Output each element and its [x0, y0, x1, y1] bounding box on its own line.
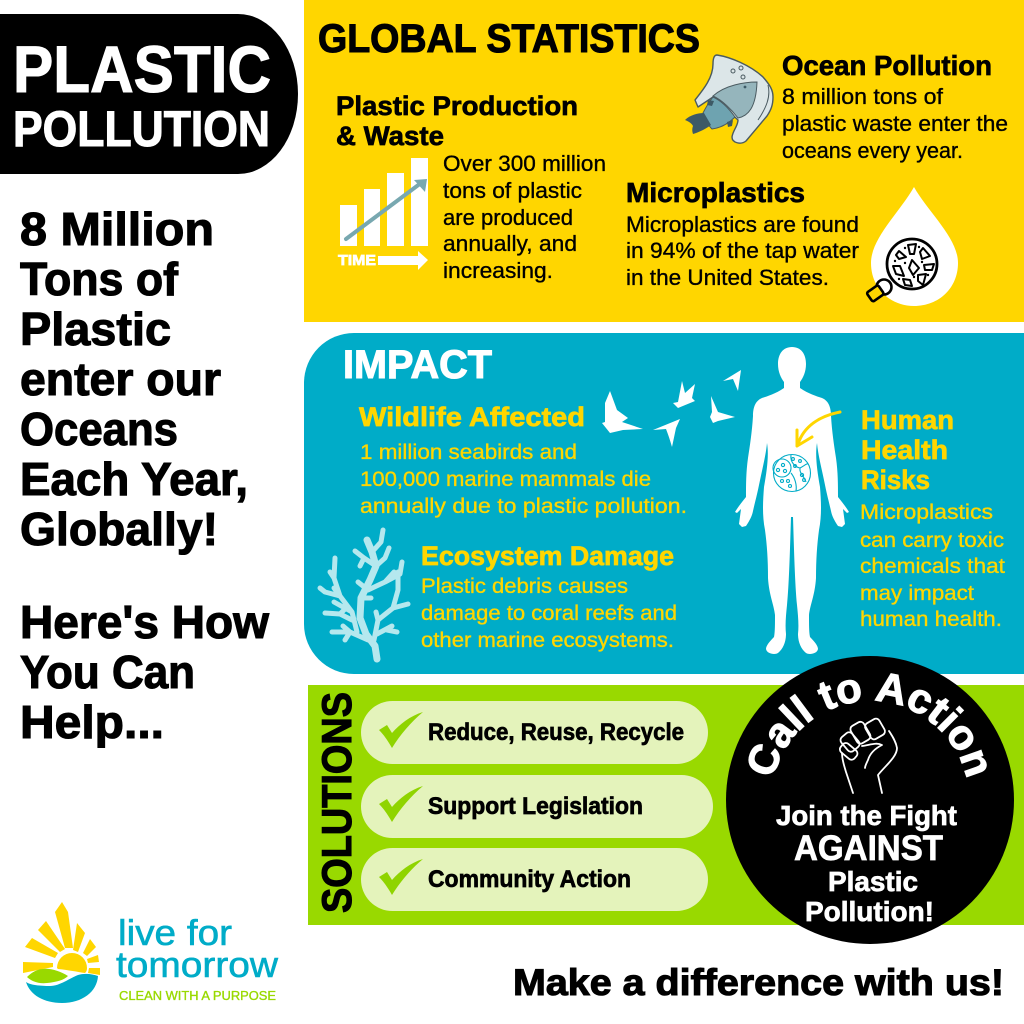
subheading: plastic production and waste: & Waste — [336, 121, 444, 151]
panel: impact — [304, 333, 1024, 674]
icon: growth bar chart — [338, 158, 428, 270]
left headline text: Here's How — [20, 596, 269, 648]
pill: support legislation — [361, 775, 713, 838]
left headline text: Plastic — [20, 303, 171, 355]
icon: microplastics in gut — [773, 454, 810, 492]
call to action badge — [726, 656, 1014, 944]
block: microplastics — [626, 177, 859, 290]
block: human health risks: Risks — [861, 465, 930, 495]
block: microplastics: in the United States. — [626, 265, 829, 290]
title badge — [0, 14, 298, 174]
pill: reduce reuse recycle — [361, 701, 708, 764]
block: ecosystem damage: Plastic debris causes — [421, 575, 628, 598]
text: production body — [443, 151, 606, 283]
icon: raised fist — [838, 717, 897, 793]
block: ocean pollution: oceans every year. — [782, 138, 963, 163]
text: production body: increasing. — [443, 258, 553, 283]
block: ocean pollution: 8 million tons of — [782, 84, 944, 109]
block: ecosystem damage — [421, 541, 677, 652]
icon: growth bar chart: TIME — [338, 252, 376, 269]
left headline text: Tons of — [20, 253, 179, 305]
text: join the fight: AGAINST — [794, 829, 943, 868]
title badge: POLLUTION — [13, 101, 270, 157]
pill: reduce reuse recycle: Reduce, Reuse, Recycle — [428, 719, 684, 746]
heading: impact: IMPACT — [343, 343, 492, 387]
block: microplastics: Microplastics are found — [626, 212, 859, 237]
block: human health risks: human health. — [860, 608, 1002, 631]
block: human health risks: Health — [861, 435, 948, 465]
block: wildlife affected: 1 million seabirds and — [360, 441, 577, 464]
block: ocean pollution — [782, 50, 1008, 163]
text: production body: are produced — [443, 205, 573, 230]
logo wordmark: CLEAN WITH A PURPOSE — [119, 988, 276, 1003]
icon: coral — [320, 530, 408, 659]
subheading: plastic production and waste: Plastic Production — [336, 91, 578, 121]
heading: global statistics: GLOBAL STATISTICS — [318, 17, 700, 61]
text: join the fight: Plastic — [828, 866, 918, 897]
block: human health risks: Microplastics — [860, 501, 993, 524]
logo: live for tomorrow — [23, 902, 279, 1003]
icon: fish in plastic bag — [685, 55, 773, 143]
icon: human body — [735, 347, 849, 654]
heading: solutions: SOLUTIONS — [313, 692, 360, 913]
logo wordmark: tomorrow — [116, 944, 279, 985]
block: wildlife affected: 100,000 marine mammals die — [360, 468, 651, 491]
curved heading: call to action: Call to Action — [748, 673, 987, 778]
block: human health risks — [860, 405, 1005, 631]
block: wildlife affected: Wildlife Affected — [359, 402, 585, 432]
left headline text: 8 Million — [20, 203, 214, 255]
text: join the fight — [776, 800, 957, 927]
left headline text: Globally! — [20, 503, 218, 555]
pill: community action: Community Action — [428, 866, 631, 893]
block: human health risks: may impact — [860, 582, 974, 605]
block: human health risks: Human — [861, 405, 954, 435]
tagline: Make a difference with us! — [513, 962, 1004, 1003]
text: join the fight: Join the Fight — [776, 800, 957, 831]
icon: arrow to gut — [797, 412, 840, 446]
block: microplastics: in 94% of the tap water — [626, 238, 859, 263]
text: join the fight: Pollution! — [805, 896, 934, 927]
pill: community action — [361, 848, 708, 911]
left headline text: You Can — [20, 646, 195, 698]
subheading: plastic production and waste — [336, 91, 578, 151]
block: ecosystem damage: Ecosystem Damage — [421, 541, 674, 571]
panel: solutions — [308, 685, 1024, 925]
text: production body: Over 300 million — [443, 151, 606, 176]
panel: global statistics — [304, 0, 1024, 322]
left headline text: enter our — [20, 353, 221, 405]
block: wildlife affected — [359, 402, 687, 518]
text: production body: tons of plastic — [443, 178, 582, 203]
block: ecosystem damage: other marine ecosystems. — [421, 629, 674, 652]
block: human health risks: can carry toxic — [860, 529, 1004, 552]
left headline text — [20, 203, 269, 748]
left headline text: Oceans — [20, 403, 178, 455]
icon: flying birds — [602, 370, 741, 447]
logo wordmark: live for — [118, 912, 232, 953]
logo icon: sun drop — [23, 902, 100, 1003]
title badge: PLASTIC — [13, 32, 271, 106]
block: wildlife affected: annually due to plastic pollution. — [360, 495, 687, 518]
block: human health risks: chemicals that — [860, 555, 1005, 578]
block: ecosystem damage: damage to coral reefs and — [421, 602, 677, 625]
block: ocean pollution: Ocean Pollution — [782, 50, 992, 81]
block: microplastics: Microplastics — [626, 177, 805, 208]
left headline text: Each Year, — [20, 453, 248, 505]
pill: support legislation: Support Legislation — [428, 793, 643, 820]
left headline text: Help... — [20, 696, 164, 748]
block: ocean pollution: plastic waste enter the — [782, 111, 1008, 136]
logo wordmark — [116, 912, 279, 1003]
icon: water drop with magnifier — [866, 187, 958, 306]
text: production body: annually, and — [443, 231, 577, 256]
